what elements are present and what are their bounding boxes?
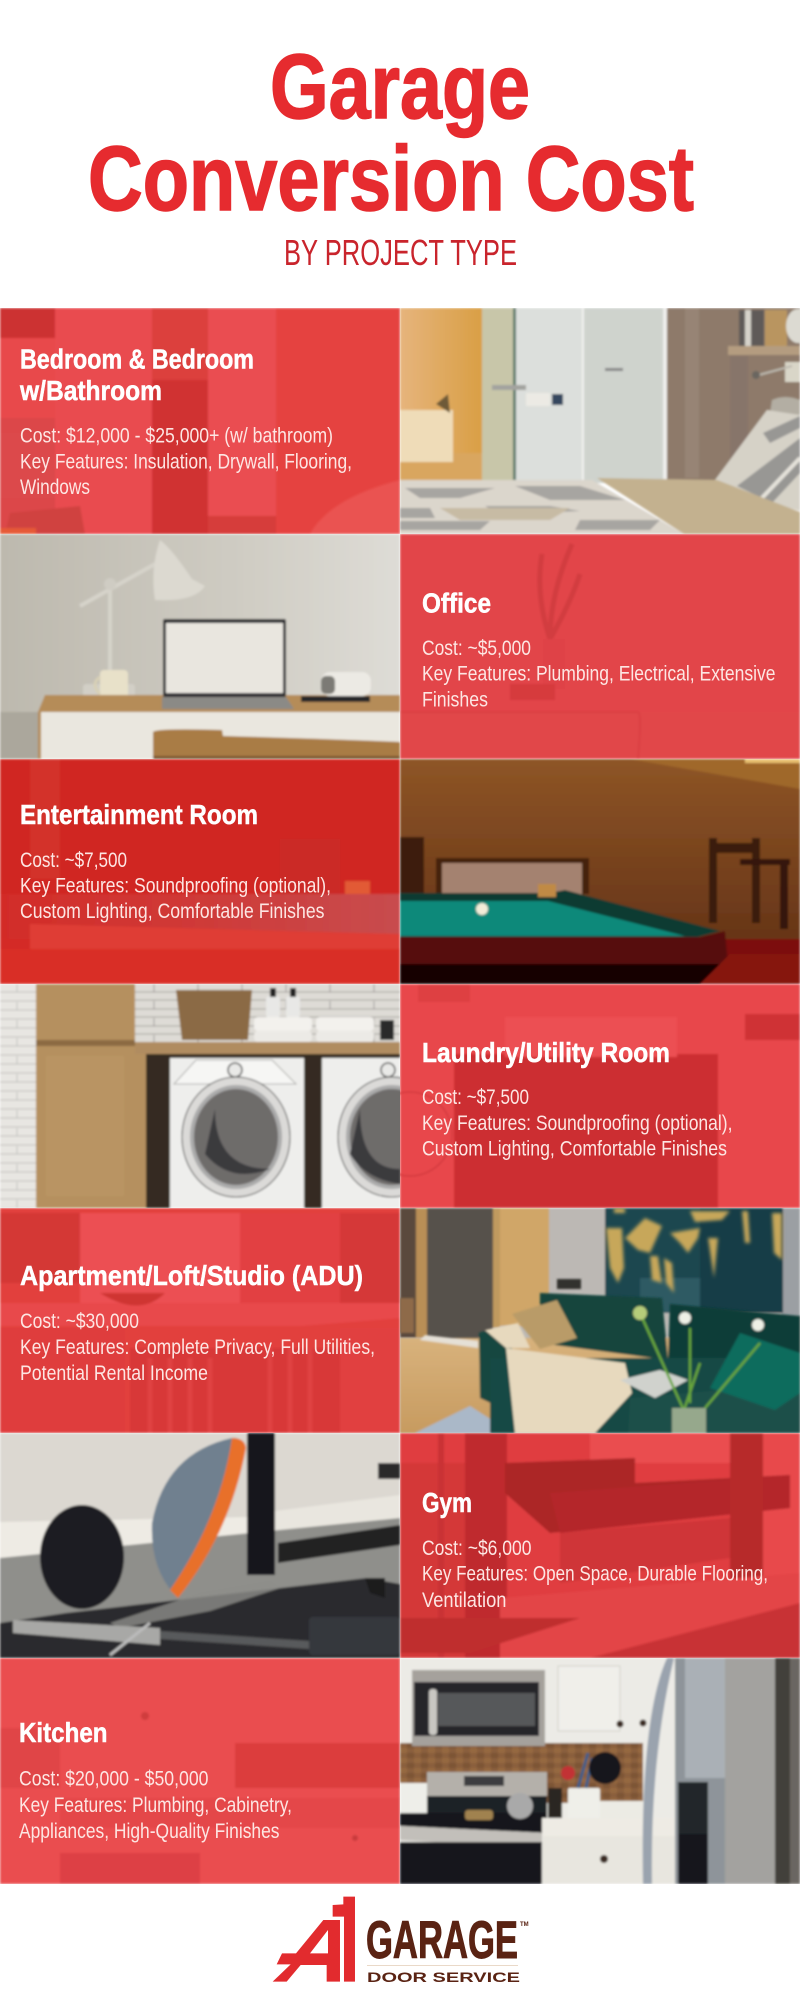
heading: Entertainment Room [20, 799, 258, 830]
subtitle: BY PROJECT TYPE [284, 232, 517, 273]
ghost photo: office [400, 534, 800, 759]
panel: bedroom text [0, 308, 400, 534]
body text: Custom Lighting, Comfortable Finishes [20, 898, 325, 923]
body text: Cost: ~$7,500 [422, 1084, 529, 1109]
body text: Key Features: Soundproofing (optional), [20, 872, 331, 898]
body text: Potential Rental Income [20, 1360, 208, 1385]
panel: entertainment text [0, 759, 400, 984]
body text: Cost: ~$7,500 [20, 847, 127, 872]
ghost photo: entertainment [0, 759, 400, 984]
body text: Cost: $12,000 - $25,000+ (w/ bathroom) [20, 422, 333, 448]
heading: Laundry/Utility Room [422, 1037, 670, 1068]
body text: Key Features: Plumbing, Cabinetry, [19, 1792, 292, 1817]
body text: Windows [20, 474, 90, 499]
photo: bedroom [400, 308, 800, 534]
logo [273, 1897, 529, 1985]
body text [422, 635, 776, 712]
body text: Key Features: Soundproofing (optional), [422, 1110, 732, 1135]
heading: Kitchen [19, 1717, 108, 1748]
title [88, 36, 694, 230]
body text [19, 1766, 292, 1843]
ghost photo: kitchen [0, 1658, 400, 1884]
body text: Ventilation [422, 1587, 506, 1612]
heading [19, 344, 254, 406]
body text: Cost: ~$30,000 [20, 1308, 139, 1333]
ghost photo: apartment [0, 1208, 400, 1433]
body text [20, 847, 331, 923]
body text: Key Features: Complete Privacy, Full Utilities, [20, 1334, 375, 1359]
body text [422, 1535, 768, 1612]
body text: Cost: ~$6,000 [422, 1535, 532, 1560]
logo wordmark [366, 1911, 529, 1985]
ghost photo: laundry [400, 984, 800, 1208]
logo wordmark: GARAGE [366, 1911, 518, 1970]
logo wordmark: DOOR SERVICE [367, 1969, 520, 1985]
photo: billiard room [400, 759, 800, 984]
panel: kitchen text [0, 1658, 400, 1884]
panel: gym text [400, 1433, 800, 1658]
body text [20, 1308, 375, 1385]
body text: Appliances, High-Quality Finishes [19, 1818, 280, 1843]
body text: Finishes [422, 686, 488, 712]
photo: apartment [400, 1208, 800, 1433]
body text: Cost: ~$5,000 [422, 635, 531, 660]
logo wordmark: TM [520, 1922, 529, 1928]
panel: laundry text [368, 984, 800, 1208]
heading: Office [422, 588, 491, 618]
logo mark: A1 [273, 1897, 355, 1982]
heading: Gym [422, 1487, 472, 1518]
body text [20, 422, 352, 499]
panel: office text [400, 534, 800, 759]
body text: Cost: $20,000 - $50,000 [19, 1766, 208, 1790]
ghost photo: gym [400, 1433, 800, 1658]
body text [422, 1084, 732, 1160]
photo: gym [0, 1433, 400, 1658]
ghost photo: bedroom [0, 308, 400, 534]
title: Garage [270, 36, 530, 138]
body text: Key Features: Insulation, Drywall, Flooring, [20, 448, 352, 474]
heading: w/Bathroom [19, 375, 162, 406]
heading: Apartment/Loft/Studio (ADU) [20, 1260, 363, 1291]
panel: apartment text [0, 1208, 400, 1433]
photo: office [0, 534, 400, 759]
photo: laundry [0, 984, 400, 1208]
heading: Bedroom & Bedroom [20, 344, 254, 374]
body text: Custom Lighting, Comfortable Finishes [422, 1136, 727, 1160]
photo: kitchen [400, 1658, 800, 1884]
